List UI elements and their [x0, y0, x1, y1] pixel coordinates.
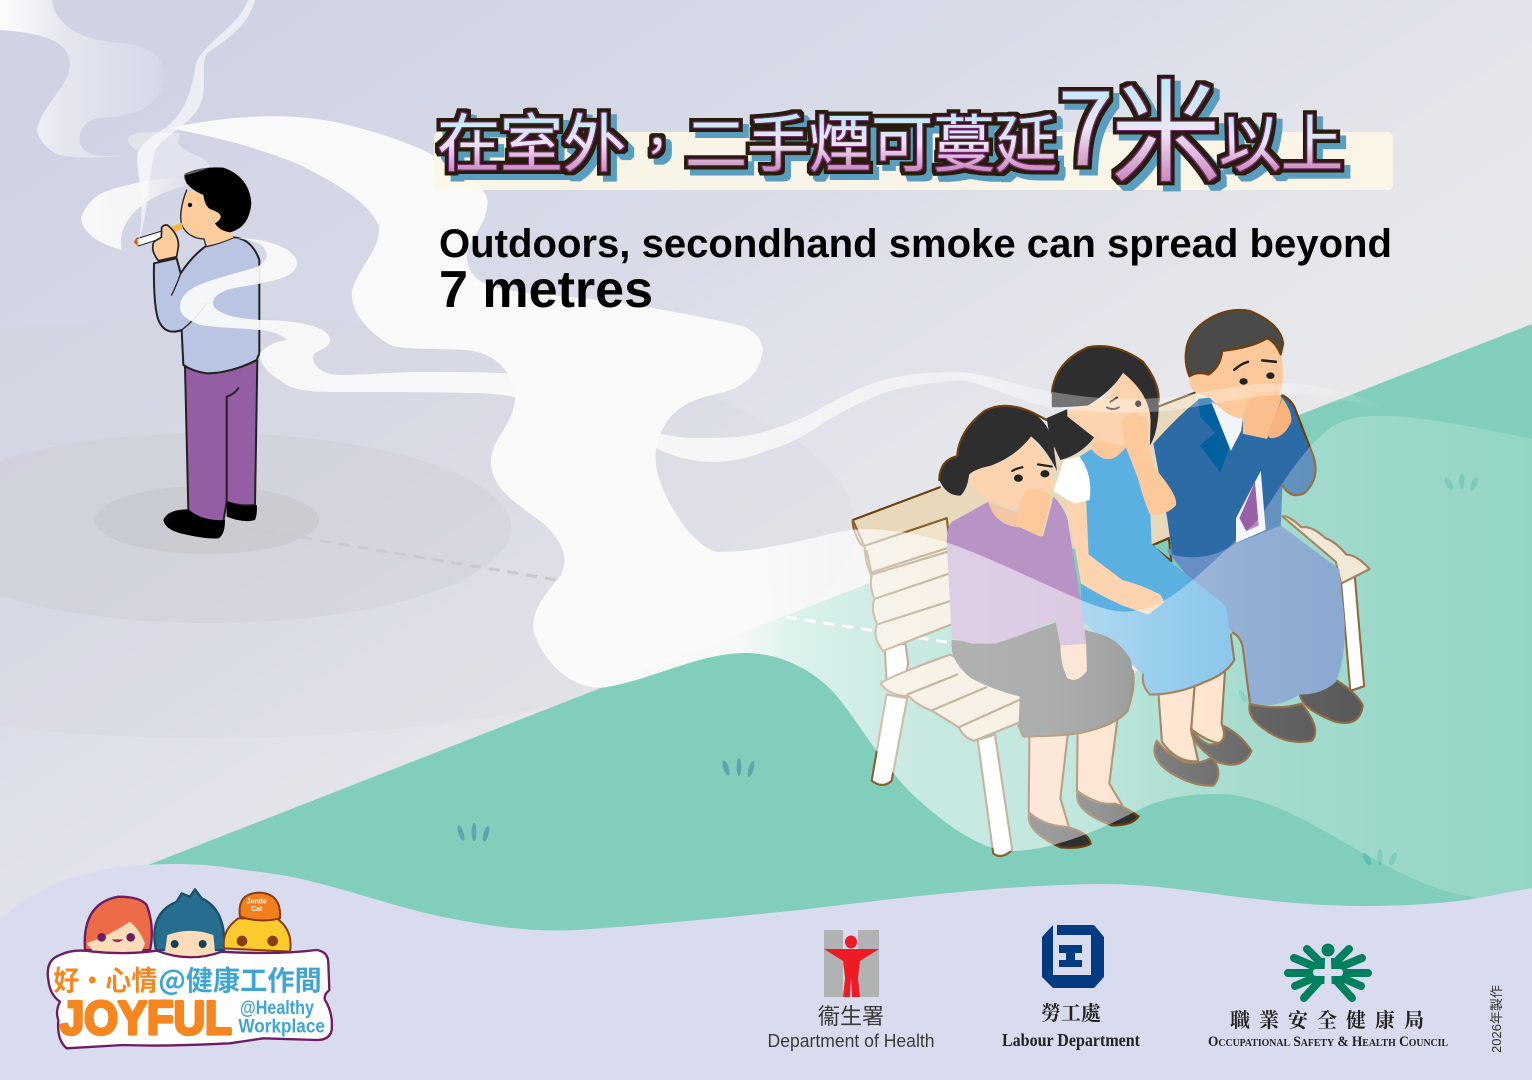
hand: [153, 225, 178, 261]
logo: Joyful @ Healthy Workplace: [48, 889, 332, 1048]
logo Chinese text: @健康工作間: [158, 958, 322, 998]
English heading: [439, 222, 1392, 319]
chick mascot: Jentle: [247, 898, 267, 905]
logo: Labour Department: Labour Department: [1002, 1030, 1140, 1050]
man on the right: [1153, 310, 1363, 742]
smoke: main cloud drifting to the bench: [170, 116, 1532, 898]
English heading: 7 metres: [439, 261, 653, 319]
bench and seated people: [853, 310, 1370, 856]
smoke: puff by the cigarette: [81, 176, 187, 250]
emblem: [1288, 944, 1368, 1000]
bottom band: [0, 864, 1532, 1080]
logo Chinese text: 好·心情: [53, 958, 157, 998]
Chinese title: 米: [1111, 44, 1221, 204]
inner leg line: [227, 388, 238, 502]
logo Chinese text: [53, 958, 322, 998]
trousers: [185, 360, 257, 522]
logo: Occupational Safety and Health Council: [1208, 944, 1448, 1050]
logo English text: Workplace: [238, 1016, 325, 1037]
girl: [85, 897, 152, 952]
logo: Labour Department: [1002, 925, 1140, 1050]
logo: Department of Health: Department of Health: [768, 1031, 934, 1051]
smoke: upper left drift: [0, 0, 164, 158]
logo: Labour Department: 勞工處: [1041, 1002, 1101, 1025]
logo English text: @Healthy: [240, 998, 314, 1019]
shoes: [163, 502, 257, 538]
label panel: [48, 950, 332, 1048]
title banner bar: [434, 132, 1393, 190]
logo: Department of Health: 衞生署: [818, 999, 884, 1031]
logo English text: JOYFUL: [60, 992, 232, 1045]
green hill: [148, 324, 1532, 960]
smoke: rising thin wisp: [135, 0, 255, 250]
chick mascot: [224, 893, 291, 952]
emblem: [824, 930, 879, 997]
cigarette: [134, 223, 183, 246]
woman in the middle: [1047, 346, 1251, 786]
logo: Occupational Safety and Health Council: 職業安全健康局: [1230, 1009, 1433, 1032]
Chinese title: [437, 44, 1343, 204]
logo: Occupational Safety and Health Council: Occupational Safety & Health Council: [1208, 1034, 1448, 1050]
bench: [853, 393, 1370, 856]
woman on the left: [939, 406, 1139, 848]
boy: [154, 889, 224, 958]
Chinese title: 二手煙可蔓延: [685, 94, 1057, 184]
hair: [184, 167, 251, 232]
Chinese title: ，: [633, 107, 681, 177]
smoke: ribbon passing the smoker: [180, 238, 960, 462]
smoker: [134, 167, 259, 538]
smoke: haze above the head: [128, 132, 210, 182]
English heading: Outdoors, secondhand smoke can spread beyond: [439, 222, 1392, 266]
production year note: 2026年製作: [1489, 985, 1504, 1053]
ground shadow rings: [0, 318, 855, 738]
grass tufts: [456, 473, 1480, 867]
emblem: [1042, 925, 1104, 988]
distance dashed line: [245, 528, 952, 643]
face: [181, 190, 233, 246]
Chinese title: 7: [1058, 49, 1114, 194]
Chinese title: 在室外: [437, 94, 626, 185]
shirt: [154, 237, 259, 373]
chick mascot: Cat: [251, 906, 263, 913]
logo: Department of Health: [768, 930, 934, 1051]
smoke: faint ribbon across faces: [960, 372, 1392, 413]
Chinese title: 以上: [1219, 94, 1343, 184]
